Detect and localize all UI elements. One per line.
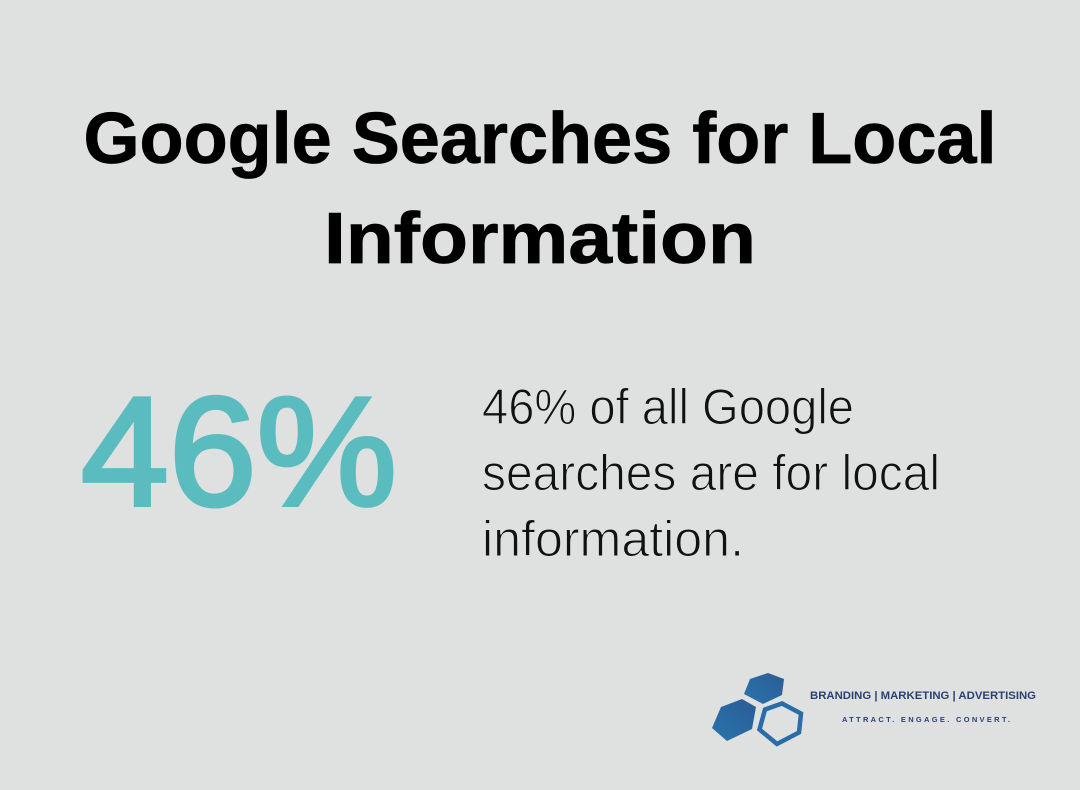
description text bbox=[482, 379, 940, 567]
title bbox=[84, 99, 996, 279]
description text: 46% of all Google bbox=[482, 379, 854, 435]
description text: information. bbox=[482, 511, 744, 567]
description text: searches are for local bbox=[482, 445, 940, 501]
logo tagline: BRANDING | MARKETING | ADVERTISING bbox=[810, 690, 1036, 702]
icon: hexagon cluster bbox=[712, 673, 801, 744]
logo bbox=[712, 673, 1036, 744]
title: Google Searches for Local bbox=[84, 99, 996, 179]
title: Information bbox=[324, 199, 756, 279]
logo tagline bbox=[810, 690, 1036, 724]
logo tagline: ATTRACT. ENGAGE. CONVERT. bbox=[842, 715, 1010, 724]
big stat: 46%: 46% bbox=[81, 365, 397, 538]
